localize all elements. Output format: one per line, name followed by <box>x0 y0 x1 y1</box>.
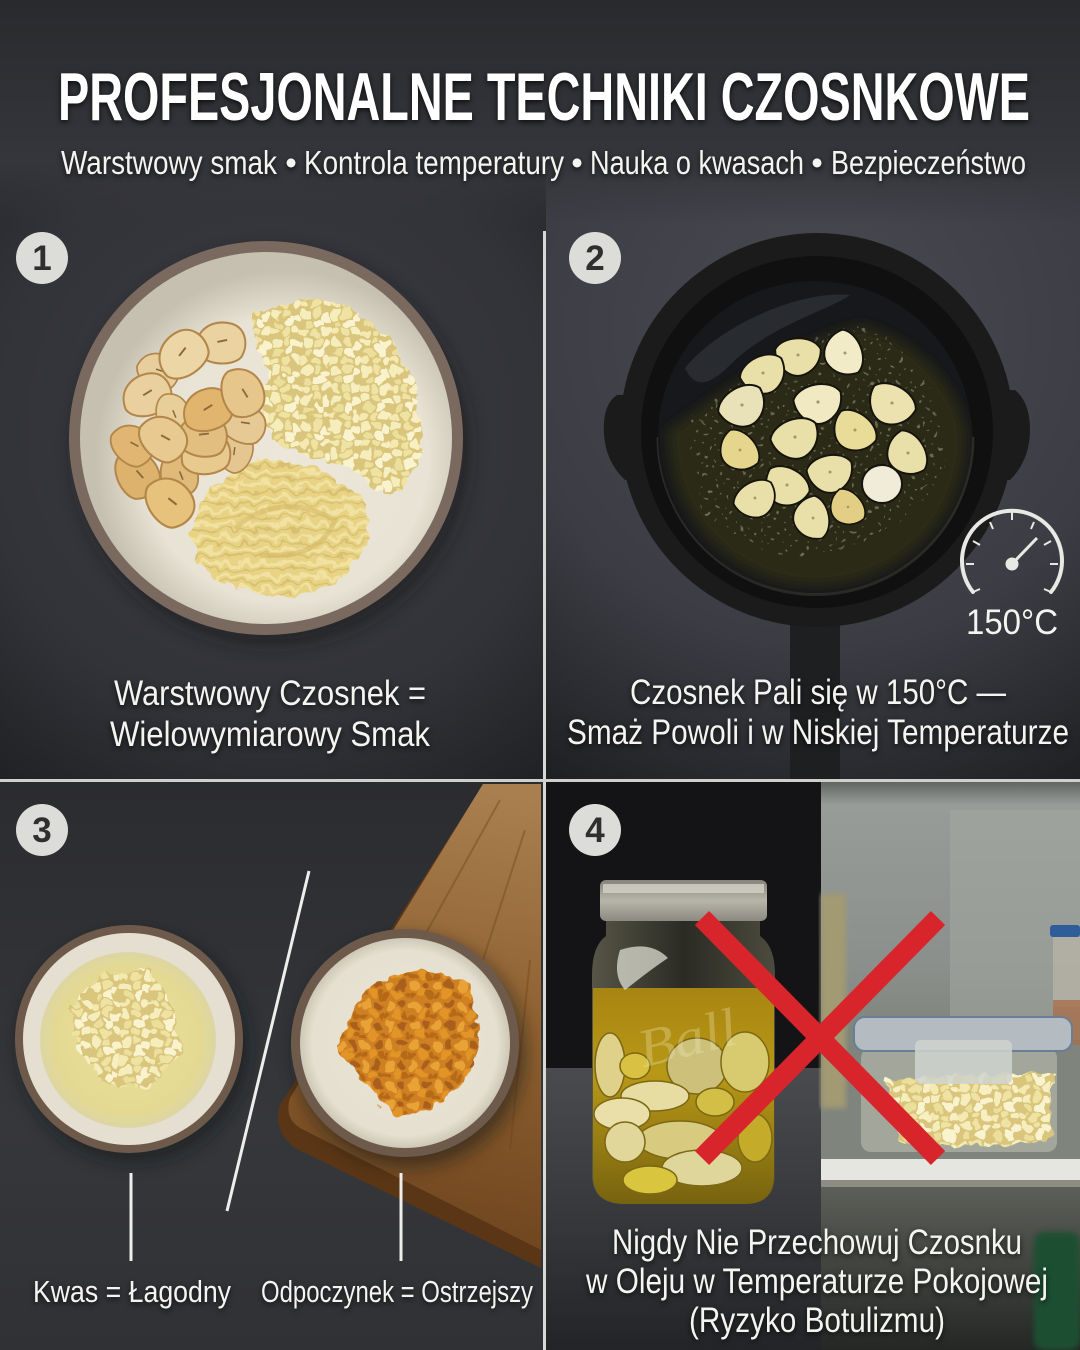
fridge background <box>821 782 1080 1350</box>
panel 3: acid vs resting <box>0 782 543 1350</box>
subtitle: Warstwowy smak <box>61 144 277 181</box>
panel 2: frying pan <box>546 0 1080 780</box>
caption 1 <box>110 674 430 754</box>
cast iron pan with garlic <box>604 233 1030 780</box>
plate with three garlic forms <box>69 241 470 646</box>
panel 4: storage warning <box>546 782 1080 1350</box>
caption 2: Czosnek Pali się w 150°C — <box>630 673 1006 712</box>
vertical divider <box>543 231 546 1350</box>
plastic container with garlic <box>854 1017 1072 1152</box>
badge 3: 3 <box>32 811 52 850</box>
horizontal divider <box>0 779 1080 782</box>
pointer: left bowl <box>130 1173 132 1261</box>
badge 3 <box>16 804 68 856</box>
caption 4 <box>585 1223 1048 1340</box>
pointer: right bowl <box>400 1173 402 1261</box>
subtitle: • <box>285 144 297 181</box>
bowl: mild garlic in acid <box>15 925 248 1162</box>
jar of garlic in oil: Ball <box>632 997 743 1079</box>
label: 150°C: 150°C <box>966 603 1058 642</box>
badge 1 <box>16 232 68 284</box>
caption 1: Warstwowy Czosnek = <box>114 674 426 713</box>
subtitle: Bezpieczeństwo <box>831 144 1026 181</box>
badge 4: 4 <box>585 811 605 850</box>
subtitle <box>61 144 1026 181</box>
subtitle: Kontrola temperatury <box>304 144 564 181</box>
label: acid: Kwas = Łagodny <box>33 1274 231 1309</box>
icon: temperature gauge <box>962 511 1062 592</box>
jar of garlic in oil <box>592 880 775 1204</box>
cutting board <box>278 784 541 1268</box>
diagonal divider <box>227 871 309 1211</box>
badge 4 <box>569 804 621 856</box>
subtitle: • <box>571 144 583 181</box>
bowl: sharper rested garlic <box>291 929 524 1166</box>
badge 2 <box>569 232 621 284</box>
subtitle: • <box>811 144 823 181</box>
icon: red X <box>702 918 938 1158</box>
panel 1: layered garlic <box>0 0 543 780</box>
subtitle: Nauka o kwasach <box>590 144 804 181</box>
caption 2 <box>567 673 1069 752</box>
header shading <box>0 0 1080 225</box>
badge 2: 2 <box>585 239 605 278</box>
label: rest: Odpoczynek = Ostrzejszy <box>261 1274 533 1309</box>
caption 1: Wielowymiarowy Smak <box>110 715 430 754</box>
caption 4: (Ryzyko Botulizmu) <box>689 1301 945 1340</box>
badge 1: 1 <box>32 239 52 278</box>
